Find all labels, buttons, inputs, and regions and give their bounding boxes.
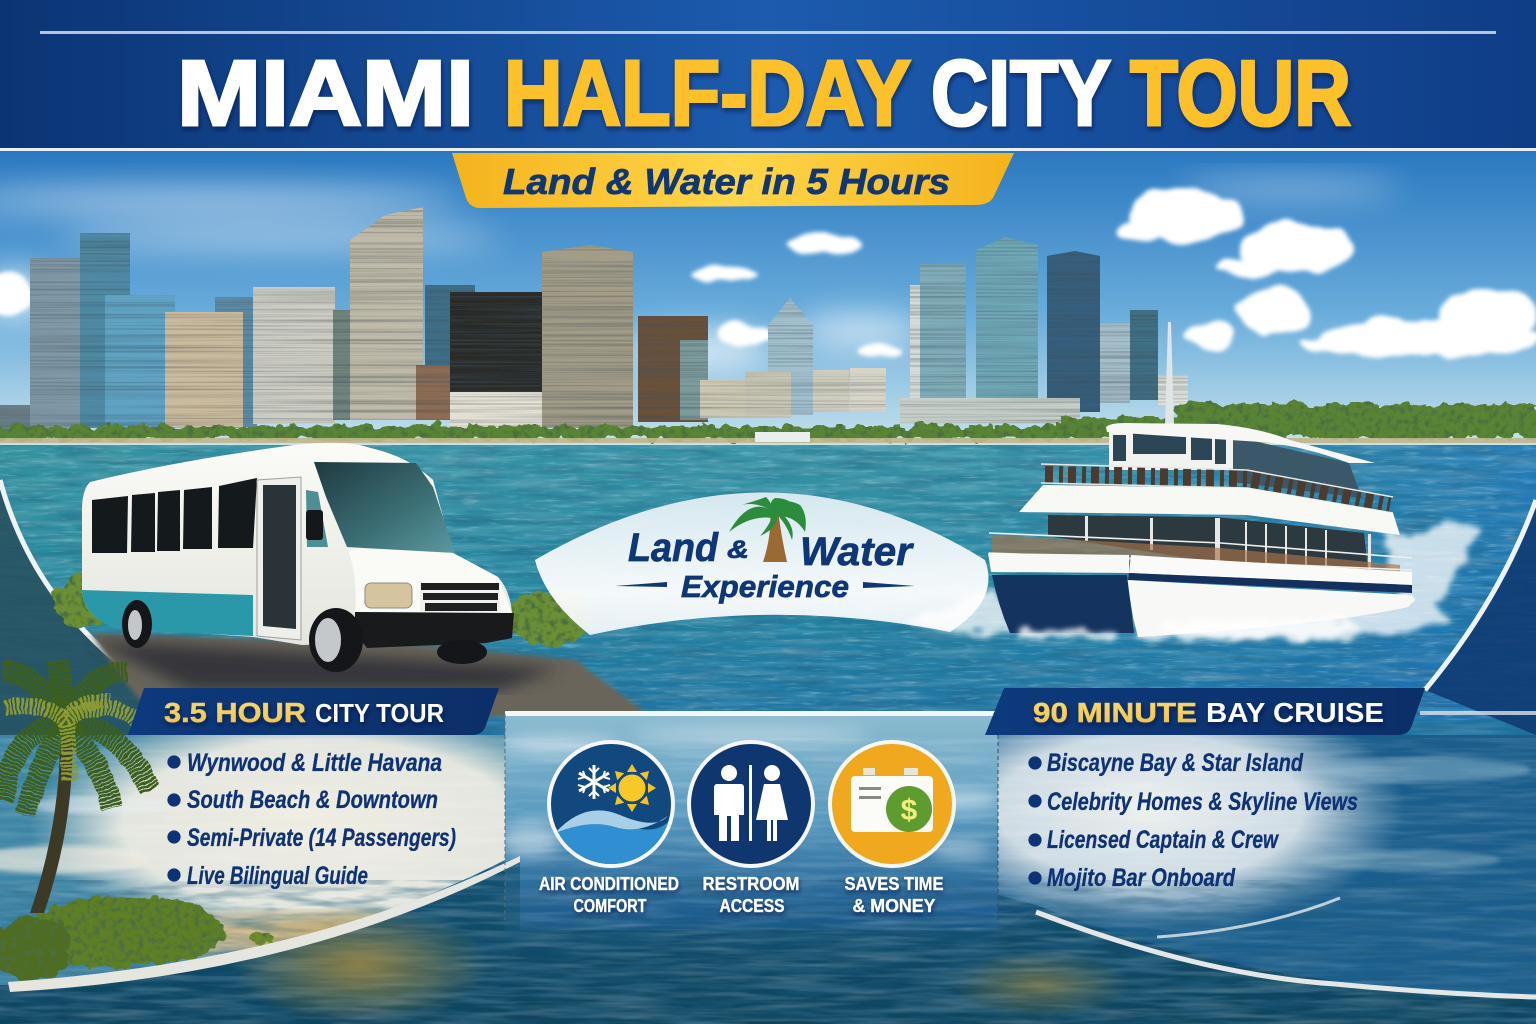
banner text: CITY TOUR [315, 698, 444, 728]
lower panel ripple overlay [0, 738, 1536, 1024]
badge text: Land [628, 526, 719, 570]
banner text [164, 697, 444, 728]
list item 4 [168, 862, 368, 890]
city tour banner [128, 688, 499, 735]
header top line [40, 31, 1496, 34]
middle panel wave highlights [500, 729, 1000, 858]
tour bus [82, 443, 514, 672]
lower deck window frames [1085, 516, 1371, 570]
icon: saves time and money [830, 742, 954, 866]
icon labels: RESTROOM [702, 874, 800, 894]
banner text: 3.5 HOUR [164, 697, 306, 728]
palm tree left [2, 660, 150, 913]
white hull [1127, 580, 1415, 637]
city skyline [0, 207, 1188, 435]
city tour list [168, 749, 456, 890]
snowflake [578, 765, 610, 799]
cruise boat [988, 322, 1415, 637]
bay cruise banner [985, 688, 1425, 735]
badge text [628, 526, 914, 604]
golden reflection right [950, 950, 1130, 1020]
lower cabin windows [1048, 515, 1368, 570]
icon labels: ACCESS [720, 896, 784, 916]
bushes bottom left [0, 896, 274, 980]
title: MIAMI [177, 41, 474, 145]
dashed divider left [504, 714, 506, 920]
icon: restroom [689, 742, 813, 866]
woman figure [756, 765, 788, 841]
side cab window [306, 490, 328, 547]
hood [347, 548, 512, 613]
clouds [0, 182, 1536, 368]
ribbon text: Land & Water in 5 Hours [503, 161, 950, 202]
badge arch [535, 492, 988, 635]
ticket card [851, 776, 933, 832]
lower rail [989, 533, 1412, 570]
header bottom line [0, 148, 1536, 151]
card lines [859, 787, 881, 799]
icon labels [539, 874, 944, 916]
bushes beside road [53, 574, 592, 646]
list item 4: Mojito Bar Onboard [1047, 864, 1236, 892]
sky under canopy [1232, 436, 1362, 498]
title: HALF-DAY [504, 41, 911, 145]
upper rule right [1420, 711, 1536, 715]
cabin windows [1113, 432, 1226, 464]
list item 3: Licensed Captain & Crew [1047, 826, 1279, 854]
badge text: Experience [681, 569, 849, 604]
sun disc [618, 774, 646, 802]
title: TOUR [1130, 41, 1351, 145]
dark water outer left [0, 480, 155, 740]
icon labels: AIR CONDITIONED [539, 874, 679, 894]
headlight [365, 583, 412, 608]
bumper [355, 612, 514, 648]
upper passengers [1045, 475, 1390, 505]
bay cruise list [1028, 749, 1358, 892]
palm icon [729, 497, 806, 562]
door glass [263, 485, 296, 629]
lower right curve [1036, 912, 1536, 997]
upper rule middle [505, 711, 995, 716]
water colour shift [0, 440, 1536, 720]
card tabs [863, 768, 918, 775]
passenger windows [92, 478, 257, 553]
dark water outer right [1425, 500, 1536, 735]
lower middle panel [505, 713, 998, 958]
icon labels: & MONEY [852, 896, 936, 916]
inner right curve [1157, 898, 1340, 937]
navy pontoon [992, 575, 1134, 633]
upper cabin [1109, 432, 1233, 470]
water background [0, 430, 1536, 1024]
ribbon shape [452, 153, 1014, 208]
header band [0, 0, 1536, 150]
water ripple texture [0, 440, 1536, 1024]
sun rays [608, 764, 656, 812]
golden reflection on water [230, 905, 490, 1024]
dashed divider right [997, 735, 999, 920]
list item 1: Wynwood & Little Havana [187, 749, 442, 777]
list item 4: Live Bilingual Guide [187, 862, 368, 890]
upper deck [1019, 485, 1400, 535]
icon: air conditioning [549, 742, 673, 870]
icon labels: SAVES TIME [844, 874, 944, 894]
hull stripe [1128, 573, 1412, 593]
list item 2: Celebrity Homes & Skyline Views [1047, 788, 1358, 816]
title [177, 41, 1351, 145]
banner shape [985, 688, 1425, 735]
white side band [1129, 555, 1412, 585]
wheels [122, 600, 487, 672]
road [90, 633, 650, 716]
mast [1165, 322, 1174, 425]
badge text: & [727, 536, 749, 564]
banner shape [128, 688, 499, 735]
canopy [1106, 423, 1375, 463]
banner text: 90 MINUTE [1033, 697, 1197, 728]
icon labels: COMFORT [574, 896, 647, 916]
man figure [714, 765, 744, 841]
list item 3: Semi-Private (14 Passengers) [187, 824, 456, 852]
list item 1: Biscayne Bay & Star Island [1047, 749, 1304, 777]
divider [749, 765, 752, 841]
left curve frame [0, 480, 155, 690]
door [257, 477, 301, 640]
white bow band [988, 553, 1129, 573]
banner text: BAY CRUISE [1206, 697, 1384, 728]
right panel background [998, 735, 1536, 1000]
lower left curve [8, 856, 520, 992]
dollar coin: $ [901, 794, 918, 827]
teal stripe [82, 590, 253, 636]
windshield [314, 462, 455, 553]
lower deck seating [992, 535, 1400, 574]
mirror [306, 510, 323, 540]
subtitle ribbon [452, 153, 1014, 208]
boat wake [905, 520, 1480, 640]
land and water experience badge [535, 492, 988, 635]
grille [420, 583, 500, 612]
lower sea dark tone [0, 858, 1536, 1024]
wave [558, 810, 668, 864]
upper rail [1041, 464, 1393, 513]
badge dashes [615, 582, 915, 588]
boat bow foam [1015, 618, 1360, 639]
sky [0, 150, 1536, 445]
badge text: Water [800, 530, 914, 574]
left panel background [0, 735, 505, 985]
right curve frame [1425, 500, 1536, 690]
list item 2: South Beach & Downtown [187, 786, 438, 814]
shoreline with trees [0, 404, 1536, 443]
banner text [1033, 697, 1384, 728]
title: CITY [931, 41, 1111, 145]
bus body [82, 443, 512, 645]
